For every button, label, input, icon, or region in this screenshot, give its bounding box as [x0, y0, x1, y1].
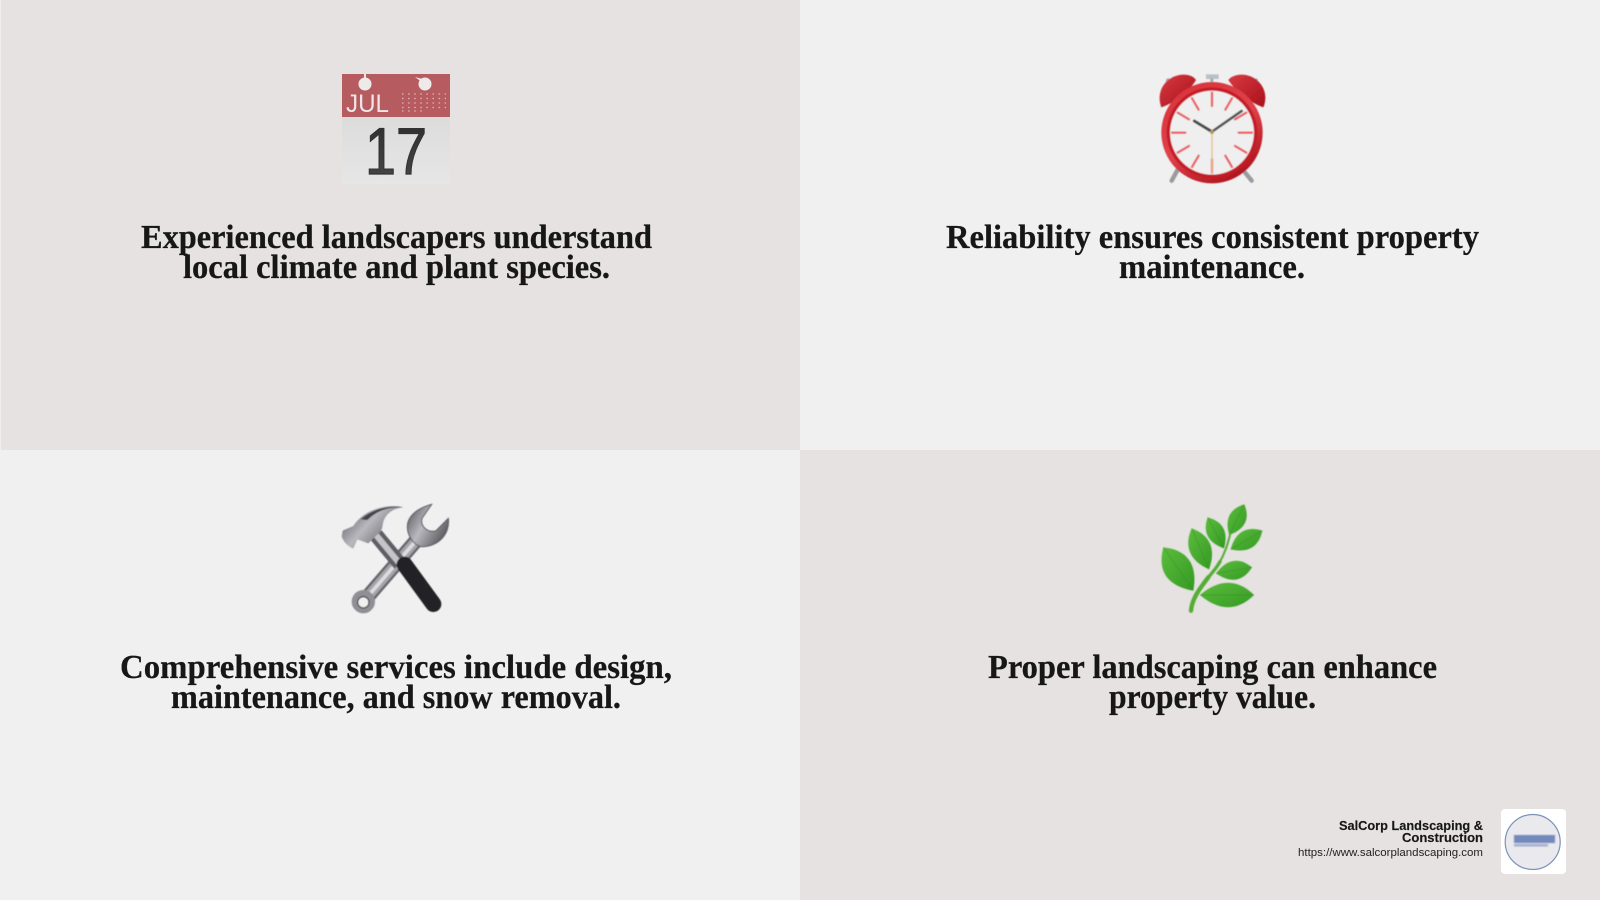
icon: calendar	[342, 74, 450, 188]
heading: experience: Experienced landscapers understand	[141, 219, 652, 256]
brand name and url	[1298, 819, 1483, 859]
icon: hammer and wrench	[342, 504, 449, 613]
icon: calendar: JUL	[346, 90, 389, 118]
icon: green leaf sprig	[1162, 504, 1262, 611]
panel: experience	[0, 0, 800, 450]
logo badge	[1501, 809, 1566, 874]
heading: reliability	[946, 219, 1479, 286]
panel: property value	[800, 450, 1600, 900]
heading: property value	[988, 649, 1437, 716]
heading: experience	[141, 219, 652, 286]
heading: reliability: Reliability ensures consistent property	[946, 219, 1479, 256]
heading: property value: property value.	[1109, 679, 1316, 716]
heading: reliability: maintenance.	[1119, 249, 1305, 286]
heading: property value: Proper landscaping can enhance	[988, 649, 1437, 686]
heading: services: Comprehensive services include design,	[120, 649, 672, 686]
brand name and url: Construction	[1402, 831, 1483, 845]
icon: alarm clock	[1160, 74, 1265, 183]
heading: experience: local climate and plant species.	[183, 249, 610, 286]
brand name and url: https://www.salcorplandscaping.com	[1298, 847, 1483, 859]
icon: calendar: 17	[365, 114, 427, 188]
panel: reliability	[800, 0, 1600, 450]
panel: services	[0, 450, 800, 900]
brand name and url: SalCorp Landscaping &	[1339, 819, 1483, 833]
heading: services: maintenance, and snow removal.	[171, 679, 621, 716]
brand footer	[1298, 809, 1566, 874]
heading: services	[120, 649, 672, 716]
